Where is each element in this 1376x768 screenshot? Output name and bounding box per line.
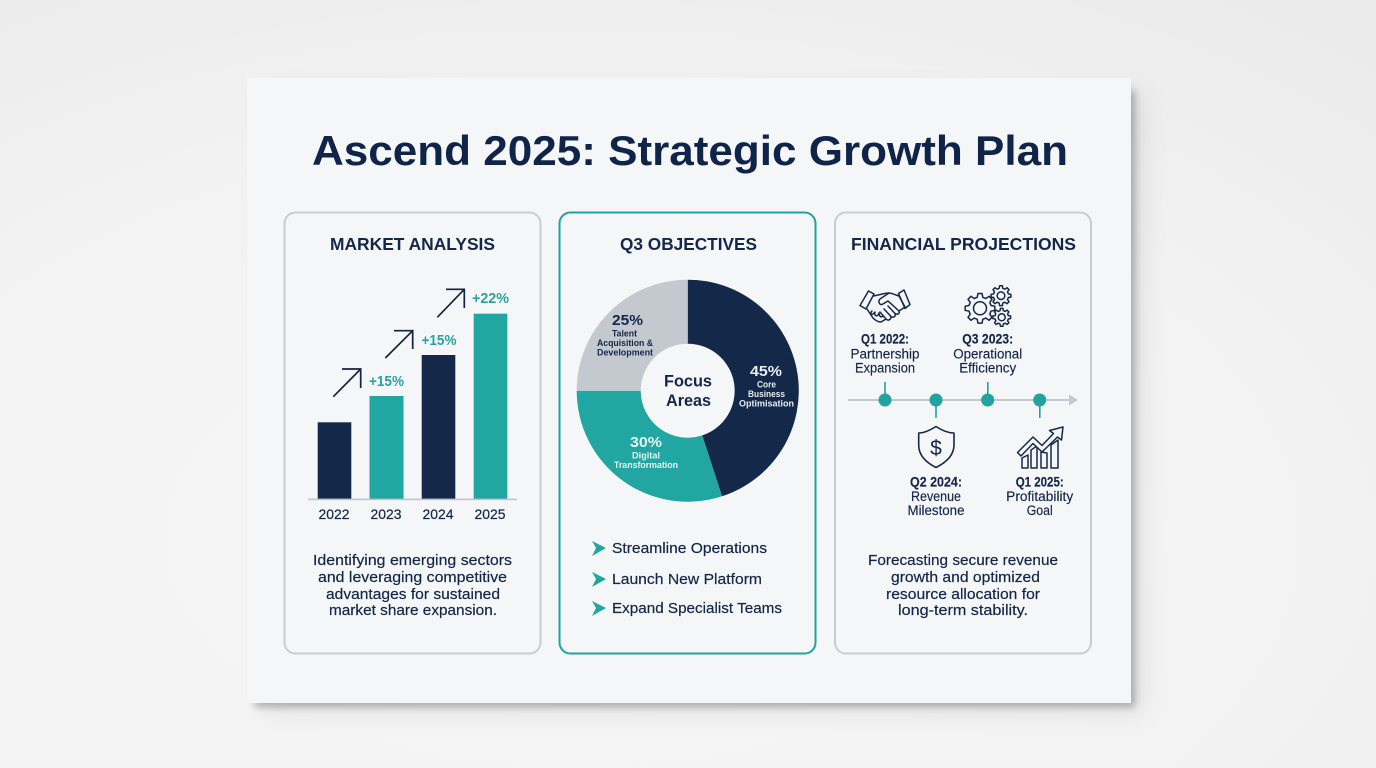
- milestone: q1 2025: Goal: [1027, 503, 1053, 518]
- donut chart: focus areas: Development: [597, 348, 653, 358]
- milestone: q2 2024: Milestone: [908, 503, 964, 518]
- bullet list: objectives: Expand Specialist Teams: [612, 600, 782, 617]
- arrow: growth 2022 to 2023: [333, 369, 361, 397]
- text block: market analysis description: Identifying emerging sectors: [313, 552, 512, 569]
- panel: financial projections: [835, 212, 1091, 654]
- milestone: q3 2023: Operational: [953, 346, 1022, 362]
- bar chart: [308, 291, 517, 522]
- donut chart: focus areas: Digital: [632, 451, 660, 461]
- milestone: q1 2022: [850, 332, 920, 376]
- text block: market analysis description: and leveraging competitive: [318, 569, 507, 586]
- text block: financial projections description: Forecasting secure revenue: [868, 552, 1058, 569]
- panel: q3 objectives: [560, 212, 816, 654]
- heading: market analysis: MARKET ANALYSIS: [330, 234, 495, 254]
- bar chart: 2024: [422, 506, 454, 522]
- icon: shield with dollar: [919, 426, 954, 468]
- bullet list: objectives: Streamline Operations: [612, 540, 767, 557]
- donut chart: focus areas: Talent: [612, 328, 637, 338]
- donut chart: focus areas: Core: [757, 380, 776, 390]
- bar chart: 2022: [318, 506, 350, 522]
- text block: market analysis description: advantages for sustained: [326, 586, 500, 603]
- donut chart: focus areas: Optimisation: [739, 399, 794, 409]
- bar chart: +15%: [369, 374, 404, 390]
- donut chart: focus areas: 45%: [750, 363, 782, 380]
- text block: financial projections description: [868, 552, 1058, 619]
- icon: shield with dollar: $: [930, 437, 942, 460]
- arrow: growth 2023 to 2024: [385, 331, 413, 358]
- milestone: q1 2025: Profitability: [1006, 489, 1073, 504]
- donut chart: focus areas: Acquisition &: [597, 338, 653, 348]
- donut chart: focus areas: [577, 280, 799, 502]
- heading: financial projections: FINANCIAL PROJECTIONS: [851, 234, 1076, 254]
- text block: financial projections description: long-term stability.: [898, 602, 1028, 619]
- milestone: q1 2025: [1006, 474, 1073, 518]
- bar chart: 2023: [370, 506, 402, 522]
- bar chart: +15%: [422, 333, 457, 349]
- milestone: q3 2023: [953, 332, 1022, 376]
- milestone: q1 2022: Partnership: [850, 346, 920, 362]
- panel: market analysis: [284, 212, 540, 654]
- text block: market analysis description: market share expansion.: [329, 602, 497, 619]
- milestone: q3 2023: Q3 2023:: [962, 332, 1013, 346]
- bar chart: +22%: [472, 291, 509, 307]
- text block: financial projections description: resource allocation for: [886, 586, 1040, 603]
- heading: q3 objectives: Q3 OBJECTIVES: [620, 234, 757, 254]
- milestone: q2 2024: Revenue: [911, 489, 961, 504]
- text block: market analysis description: [313, 552, 512, 619]
- bullet list: objectives: [592, 540, 782, 617]
- title: Ascend 2025: Strategic Growth Plan: [312, 127, 1068, 174]
- milestone: q1 2025: Q1 2025:: [1016, 474, 1064, 490]
- milestone: q2 2024: Q2 2024:: [910, 474, 962, 490]
- milestone: q1 2022: Expansion: [855, 360, 915, 376]
- icon: handshake: [860, 290, 910, 322]
- donut chart: focus areas: Areas: [666, 391, 711, 410]
- panel: poster sheet: [247, 78, 1131, 703]
- icon: gears: [965, 286, 1011, 326]
- arrow: growth 2024 to 2025: [437, 289, 464, 317]
- milestone: q1 2022: Q1 2022:: [861, 332, 909, 346]
- bullet list: objectives: Launch New Platform: [612, 571, 762, 588]
- bar chart: 2025: [474, 506, 506, 522]
- donut chart: focus areas: 30%: [630, 434, 662, 451]
- donut chart: focus areas: Business: [748, 389, 785, 399]
- text block: financial projections description: growth and optimized: [891, 569, 1040, 586]
- donut chart: focus areas: Transformation: [614, 460, 678, 470]
- donut chart: focus areas: 25%: [612, 312, 643, 329]
- milestone: q2 2024: [908, 474, 964, 518]
- timeline: [848, 382, 1078, 418]
- donut chart: focus areas: Focus: [664, 372, 712, 391]
- milestone: q3 2023: Efficiency: [959, 360, 1016, 376]
- icon: growth chart: [1018, 427, 1063, 468]
